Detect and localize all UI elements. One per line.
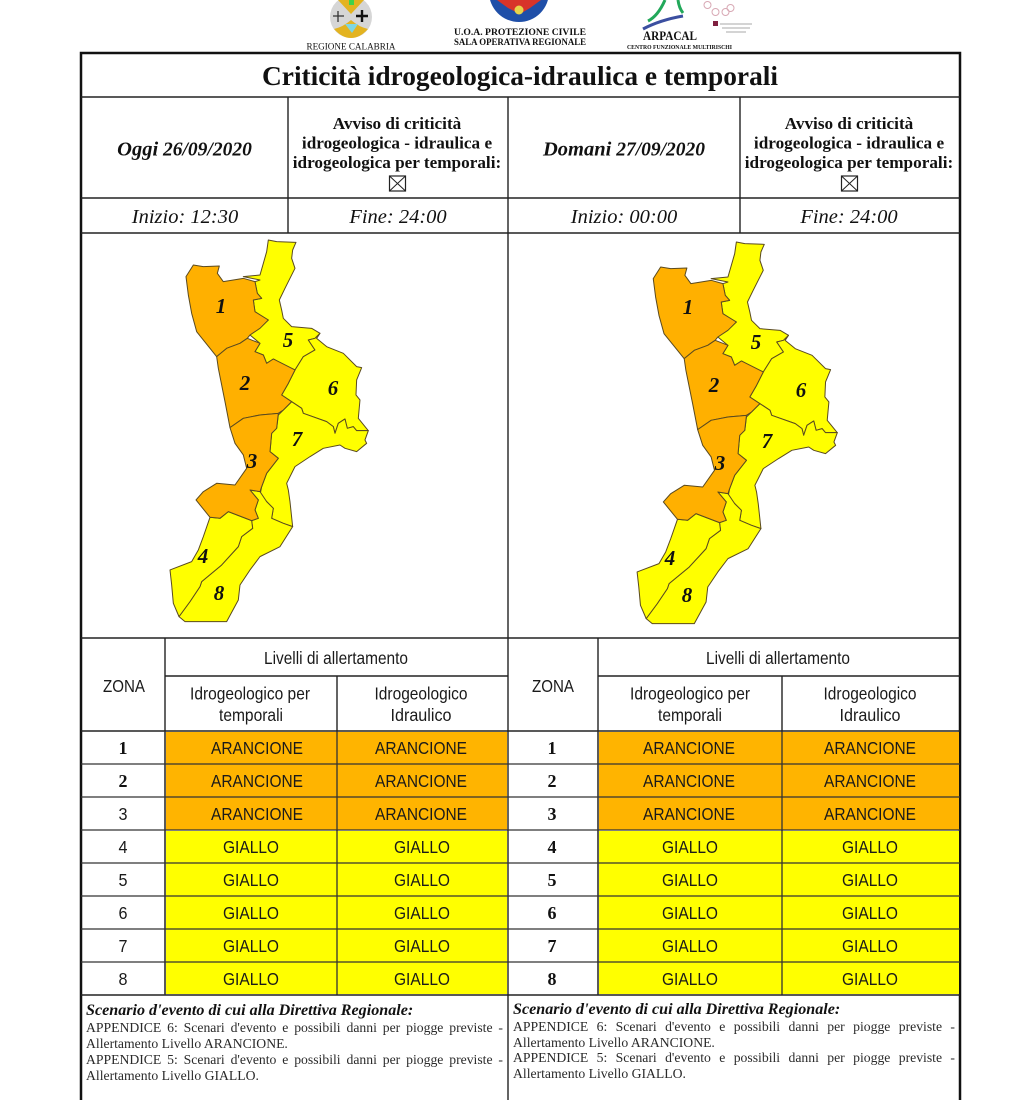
notice: domani: idrogeologica per temporali: bbox=[745, 153, 953, 172]
rows: oggi: ARANCIONE bbox=[375, 804, 467, 824]
table header: domani: Livelli di allertamento bbox=[706, 648, 850, 668]
logo: Regione Calabria: REGIONE CALABRIA bbox=[306, 42, 396, 52]
table header: oggi: ZONA bbox=[103, 676, 145, 696]
table header: oggi bbox=[103, 648, 468, 725]
text block: scenario oggi: Allertamento Livello ARANCIONE. bbox=[86, 1036, 288, 1051]
rows: domani: 7 bbox=[548, 936, 556, 956]
rows: domani: 4 bbox=[548, 837, 556, 857]
map: domani: 8 bbox=[682, 583, 693, 607]
map: oggi: 5 bbox=[283, 328, 293, 352]
rows: oggi: GIALLO bbox=[223, 837, 279, 857]
rows: oggi: GIALLO bbox=[223, 903, 279, 923]
rows: domani: GIALLO bbox=[842, 969, 898, 989]
table header: oggi: Idrogeologico bbox=[374, 684, 468, 704]
rows: domani: GIALLO bbox=[662, 837, 718, 857]
table: domani bbox=[508, 648, 960, 995]
map: oggi: 2 bbox=[239, 371, 251, 395]
map: domani: 4 bbox=[664, 546, 675, 570]
table header: domani bbox=[532, 648, 916, 725]
table header: domani: ZONA bbox=[532, 676, 574, 696]
map: domani: 6 bbox=[796, 378, 807, 402]
table header: oggi: Idraulico bbox=[390, 705, 452, 725]
rows: oggi: 4 bbox=[118, 837, 128, 857]
rows: oggi: 1 bbox=[118, 738, 128, 758]
rows: domani: 1 bbox=[548, 738, 556, 758]
table header: oggi: Livelli di allertamento bbox=[264, 648, 408, 668]
rows: oggi: 7 bbox=[118, 936, 128, 956]
text block: scenario oggi: APPENDICE 6: Scenari d'evento e possibili danni per piogge previste - bbox=[86, 1020, 503, 1035]
rows: domani: GIALLO bbox=[842, 870, 898, 890]
rows: oggi: 5 bbox=[118, 870, 128, 890]
text block: scenario domani: Allertamento Livello ARANCIONE. bbox=[513, 1035, 715, 1050]
table: oggi bbox=[81, 648, 508, 995]
text block: scenario oggi: APPENDICE 5: Scenari d'evento e possibili danni per piogge previste - bbox=[86, 1052, 503, 1067]
time: oggi end: Fine: 24:00 bbox=[348, 206, 447, 228]
table header: domani: Idrogeologico bbox=[824, 684, 916, 704]
title: Criticità idrogeologica-idraulica e temporali bbox=[262, 61, 778, 91]
table header: oggi: temporali bbox=[219, 705, 283, 725]
rows: oggi: GIALLO bbox=[394, 969, 450, 989]
map: oggi: 6 bbox=[328, 376, 339, 400]
rows: oggi: GIALLO bbox=[223, 936, 279, 956]
map: domani: 1 bbox=[683, 295, 693, 319]
logo: ARPACAL: ARPACAL bbox=[643, 29, 697, 43]
text block: scenario domani: Allertamento Livello GIALLO. bbox=[513, 1066, 686, 1081]
map: oggi: 7 bbox=[292, 427, 304, 451]
table header: domani: temporali bbox=[658, 705, 722, 725]
map: domani bbox=[637, 242, 837, 624]
logo: Protezione Civile: U.O.A. PROTEZIONE CIVILE bbox=[454, 28, 586, 38]
rows: domani: GIALLO bbox=[842, 903, 898, 923]
rows: oggi bbox=[81, 731, 508, 995]
rows: domani: 2 bbox=[548, 771, 556, 791]
map: oggi: 3 bbox=[246, 449, 257, 473]
text block: scenario oggi: Scenario d'evento di cui alla Direttiva Regionale: bbox=[86, 1002, 413, 1019]
text block: scenario oggi: Allertamento Livello GIALLO. bbox=[86, 1068, 259, 1083]
rows: domani: 6 bbox=[548, 903, 556, 923]
rows: domani: GIALLO bbox=[842, 837, 898, 857]
rows: domani: ARANCIONE bbox=[643, 804, 735, 824]
rows: domani bbox=[508, 731, 960, 995]
rows: domani: GIALLO bbox=[662, 969, 718, 989]
rows: domani: GIALLO bbox=[662, 870, 718, 890]
rows: domani: 8 bbox=[548, 969, 556, 989]
text block: scenario domani: Scenario d'evento di cui alla Direttiva Regionale: bbox=[513, 1001, 840, 1018]
notice: domani: Avviso di criticità bbox=[785, 114, 914, 133]
map: oggi: 1 bbox=[216, 294, 226, 318]
notice: oggi: idrogeologica per temporali: bbox=[293, 153, 501, 172]
map: oggi bbox=[170, 240, 368, 622]
rows: oggi: GIALLO bbox=[394, 870, 450, 890]
rows: domani: GIALLO bbox=[662, 903, 718, 923]
notice: oggi: Avviso di criticità bbox=[333, 114, 462, 133]
rows: domani: 3 bbox=[548, 804, 556, 824]
notice: domani bbox=[745, 114, 953, 191]
rows: oggi: 2 bbox=[118, 771, 128, 791]
rows: oggi: GIALLO bbox=[394, 837, 450, 857]
rows: domani: GIALLO bbox=[842, 936, 898, 956]
rows: oggi: ARANCIONE bbox=[211, 738, 303, 758]
notice: oggi: idrogeologica - idraulica e bbox=[302, 134, 492, 152]
logo: ARPACAL: CENTRO FUNZIONALE MULTIRISCHI bbox=[627, 44, 732, 51]
rows: oggi: ARANCIONE bbox=[375, 771, 467, 791]
logo: Protezione Civile: SALA OPERATIVA REGIONALE bbox=[454, 38, 586, 48]
rows: domani: ARANCIONE bbox=[824, 738, 916, 758]
rows: oggi: ARANCIONE bbox=[375, 738, 467, 758]
table header: oggi: Idrogeologico per bbox=[190, 684, 310, 704]
rows: domani: ARANCIONE bbox=[643, 771, 735, 791]
time: domani end: Fine: 24:00 bbox=[799, 206, 898, 228]
rows: domani: ARANCIONE bbox=[643, 738, 735, 758]
rows: oggi: GIALLO bbox=[223, 870, 279, 890]
text block: scenario oggi bbox=[86, 1002, 503, 1083]
rows: oggi: GIALLO bbox=[394, 903, 450, 923]
rows: domani: ARANCIONE bbox=[824, 804, 916, 824]
rows: domani: 5 bbox=[548, 870, 556, 890]
text block: scenario domani: APPENDICE 6: Scenari d'evento e possibili danni per piogge previste - bbox=[513, 1019, 955, 1034]
map: domani: 7 bbox=[762, 429, 774, 453]
rows: domani: ARANCIONE bbox=[824, 771, 916, 791]
rows: oggi: ARANCIONE bbox=[211, 804, 303, 824]
text block: scenario domani bbox=[513, 1001, 955, 1081]
logo: Protezione Civile bbox=[454, 0, 586, 48]
rows: oggi: 3 bbox=[118, 804, 128, 824]
rows: oggi: GIALLO bbox=[394, 936, 450, 956]
rows: oggi: 8 bbox=[118, 969, 128, 989]
notice: domani: idrogeologica - idraulica e bbox=[754, 134, 944, 152]
map: oggi: 4 bbox=[197, 544, 208, 568]
map: domani: 2 bbox=[708, 373, 720, 397]
rows: oggi: GIALLO bbox=[223, 969, 279, 989]
rows: oggi: 6 bbox=[118, 903, 128, 923]
text block: scenario domani: APPENDICE 5: Scenari d'evento e possibili danni per piogge previste - bbox=[513, 1050, 955, 1065]
time: oggi start: Inizio: 12:30 bbox=[131, 206, 238, 228]
rows: oggi: ARANCIONE bbox=[211, 771, 303, 791]
notice: oggi bbox=[293, 114, 501, 191]
table header: domani: Idrogeologico per bbox=[630, 684, 750, 704]
map: domani: 3 bbox=[714, 451, 725, 475]
map: domani: 5 bbox=[751, 330, 761, 354]
heading: oggi date: Oggi 26/09/2020 bbox=[117, 138, 252, 160]
heading: domani date: Domani 27/09/2020 bbox=[542, 138, 705, 160]
table header: domani: Idraulico bbox=[840, 705, 900, 725]
logo: Regione Calabria bbox=[306, 0, 396, 52]
time: domani start: Inizio: 00:00 bbox=[570, 206, 677, 228]
logo: ARPACAL bbox=[627, 0, 752, 51]
map: oggi: 8 bbox=[214, 581, 225, 605]
rows: domani: GIALLO bbox=[662, 936, 718, 956]
